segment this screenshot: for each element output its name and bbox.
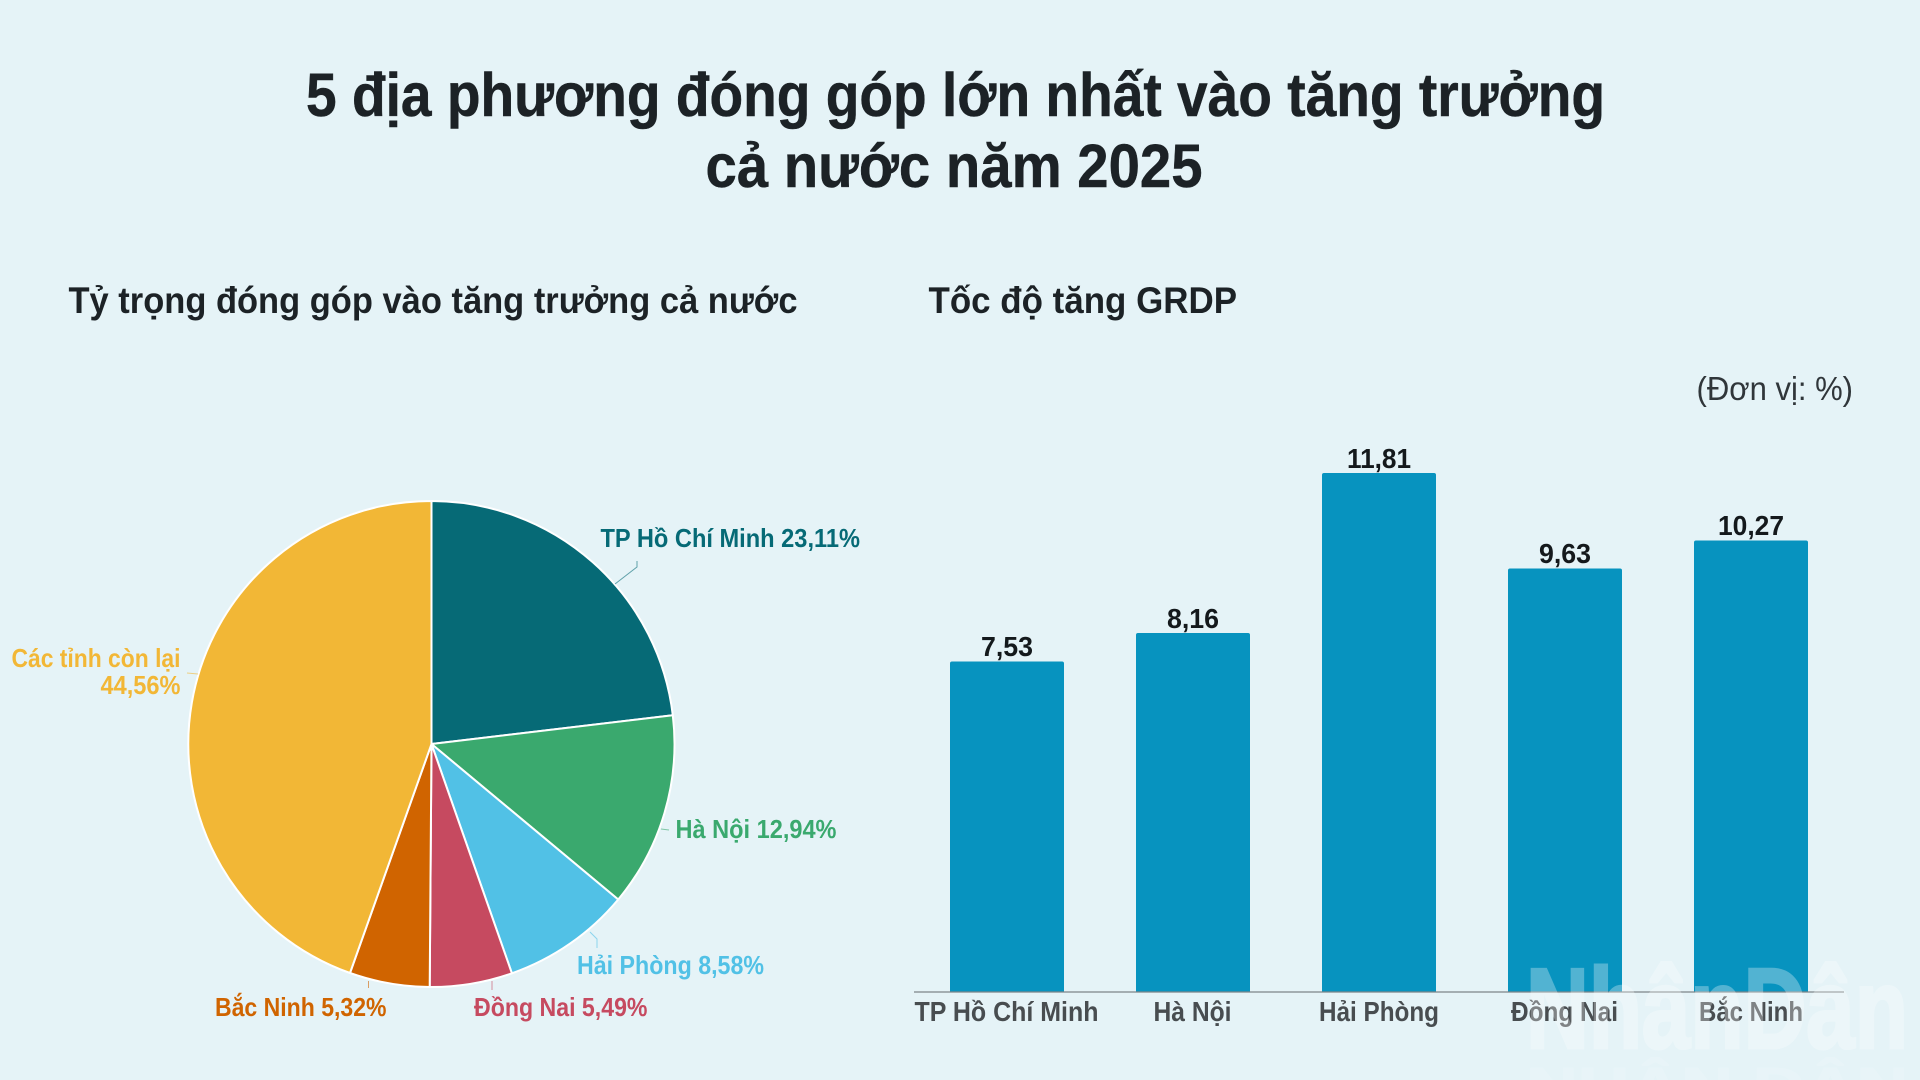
pie label: Các tỉnh còn lại: Các tỉnh còn lại [12, 643, 180, 673]
slice: Các tỉnh còn lại [188, 501, 432, 973]
slice: Đồng Nai [430, 744, 512, 987]
title: 5 địa phương đóng góp lớn nhất vào tăng trưởng [306, 61, 1605, 129]
bar: Hà Nội: 8,16 [1167, 603, 1219, 634]
bar: Hải Phòng: 11,81 [1347, 443, 1411, 474]
slice: Hải Phòng [432, 744, 618, 973]
slice: Hà Nội [432, 715, 675, 900]
bar: TP Hồ Chí Minh: 7,53 [981, 631, 1033, 662]
pie label: Hà Nội: Hà Nội 12,94% [676, 814, 836, 844]
bar: Hải Phòng [1322, 443, 1436, 992]
heading: contribution share: Tỷ trọng đóng góp vào tăng trưởng cả nước [68, 280, 798, 321]
pie label: TP Hồ Chí Minh: TP Hồ Chí Minh 23,11% [600, 523, 860, 553]
bar: Bắc Ninh: 10,27 [1718, 510, 1784, 541]
unit note: (Đơn vị: %) [1696, 370, 1853, 407]
bar: Đồng Nai: 9,63 [1539, 538, 1591, 569]
bar: Bắc Ninh [1694, 510, 1808, 992]
slice: Bắc Ninh [350, 744, 432, 987]
pie label: Bắc Ninh: Bắc Ninh 5,32% [215, 992, 386, 1022]
x axis labels [914, 996, 1803, 1027]
pie leader lines [187, 561, 669, 990]
bar: Hà Nội [1136, 603, 1250, 992]
title [306, 61, 1605, 200]
pie chart [188, 501, 675, 987]
bar chart [950, 443, 1808, 992]
pie label: Các tỉnh còn lại [12, 643, 180, 700]
bar: TP Hồ Chí Minh [950, 631, 1064, 992]
title: cả nước năm 2025 [706, 132, 1202, 200]
x axis labels: Đồng Nai [1511, 996, 1618, 1027]
heading: GRDP growth: Tốc độ tăng GRDP [928, 280, 1237, 321]
pie label: Các tỉnh còn lại: 44,56% [100, 670, 180, 700]
pie label: Đồng Nai: Đồng Nai 5,49% [474, 992, 648, 1022]
x axis labels: TP Hồ Chí Minh [914, 996, 1098, 1027]
x axis labels: Bắc Ninh [1699, 996, 1803, 1027]
bar: Đồng Nai [1508, 538, 1622, 992]
x axis labels: Hà Nội [1154, 996, 1232, 1027]
x axis labels: Hải Phòng [1319, 996, 1439, 1027]
slice: TP Hồ Chí Minh [432, 501, 673, 744]
x axis line [914, 991, 1844, 993]
pie label: Hải Phòng: Hải Phòng 8,58% [577, 950, 764, 980]
